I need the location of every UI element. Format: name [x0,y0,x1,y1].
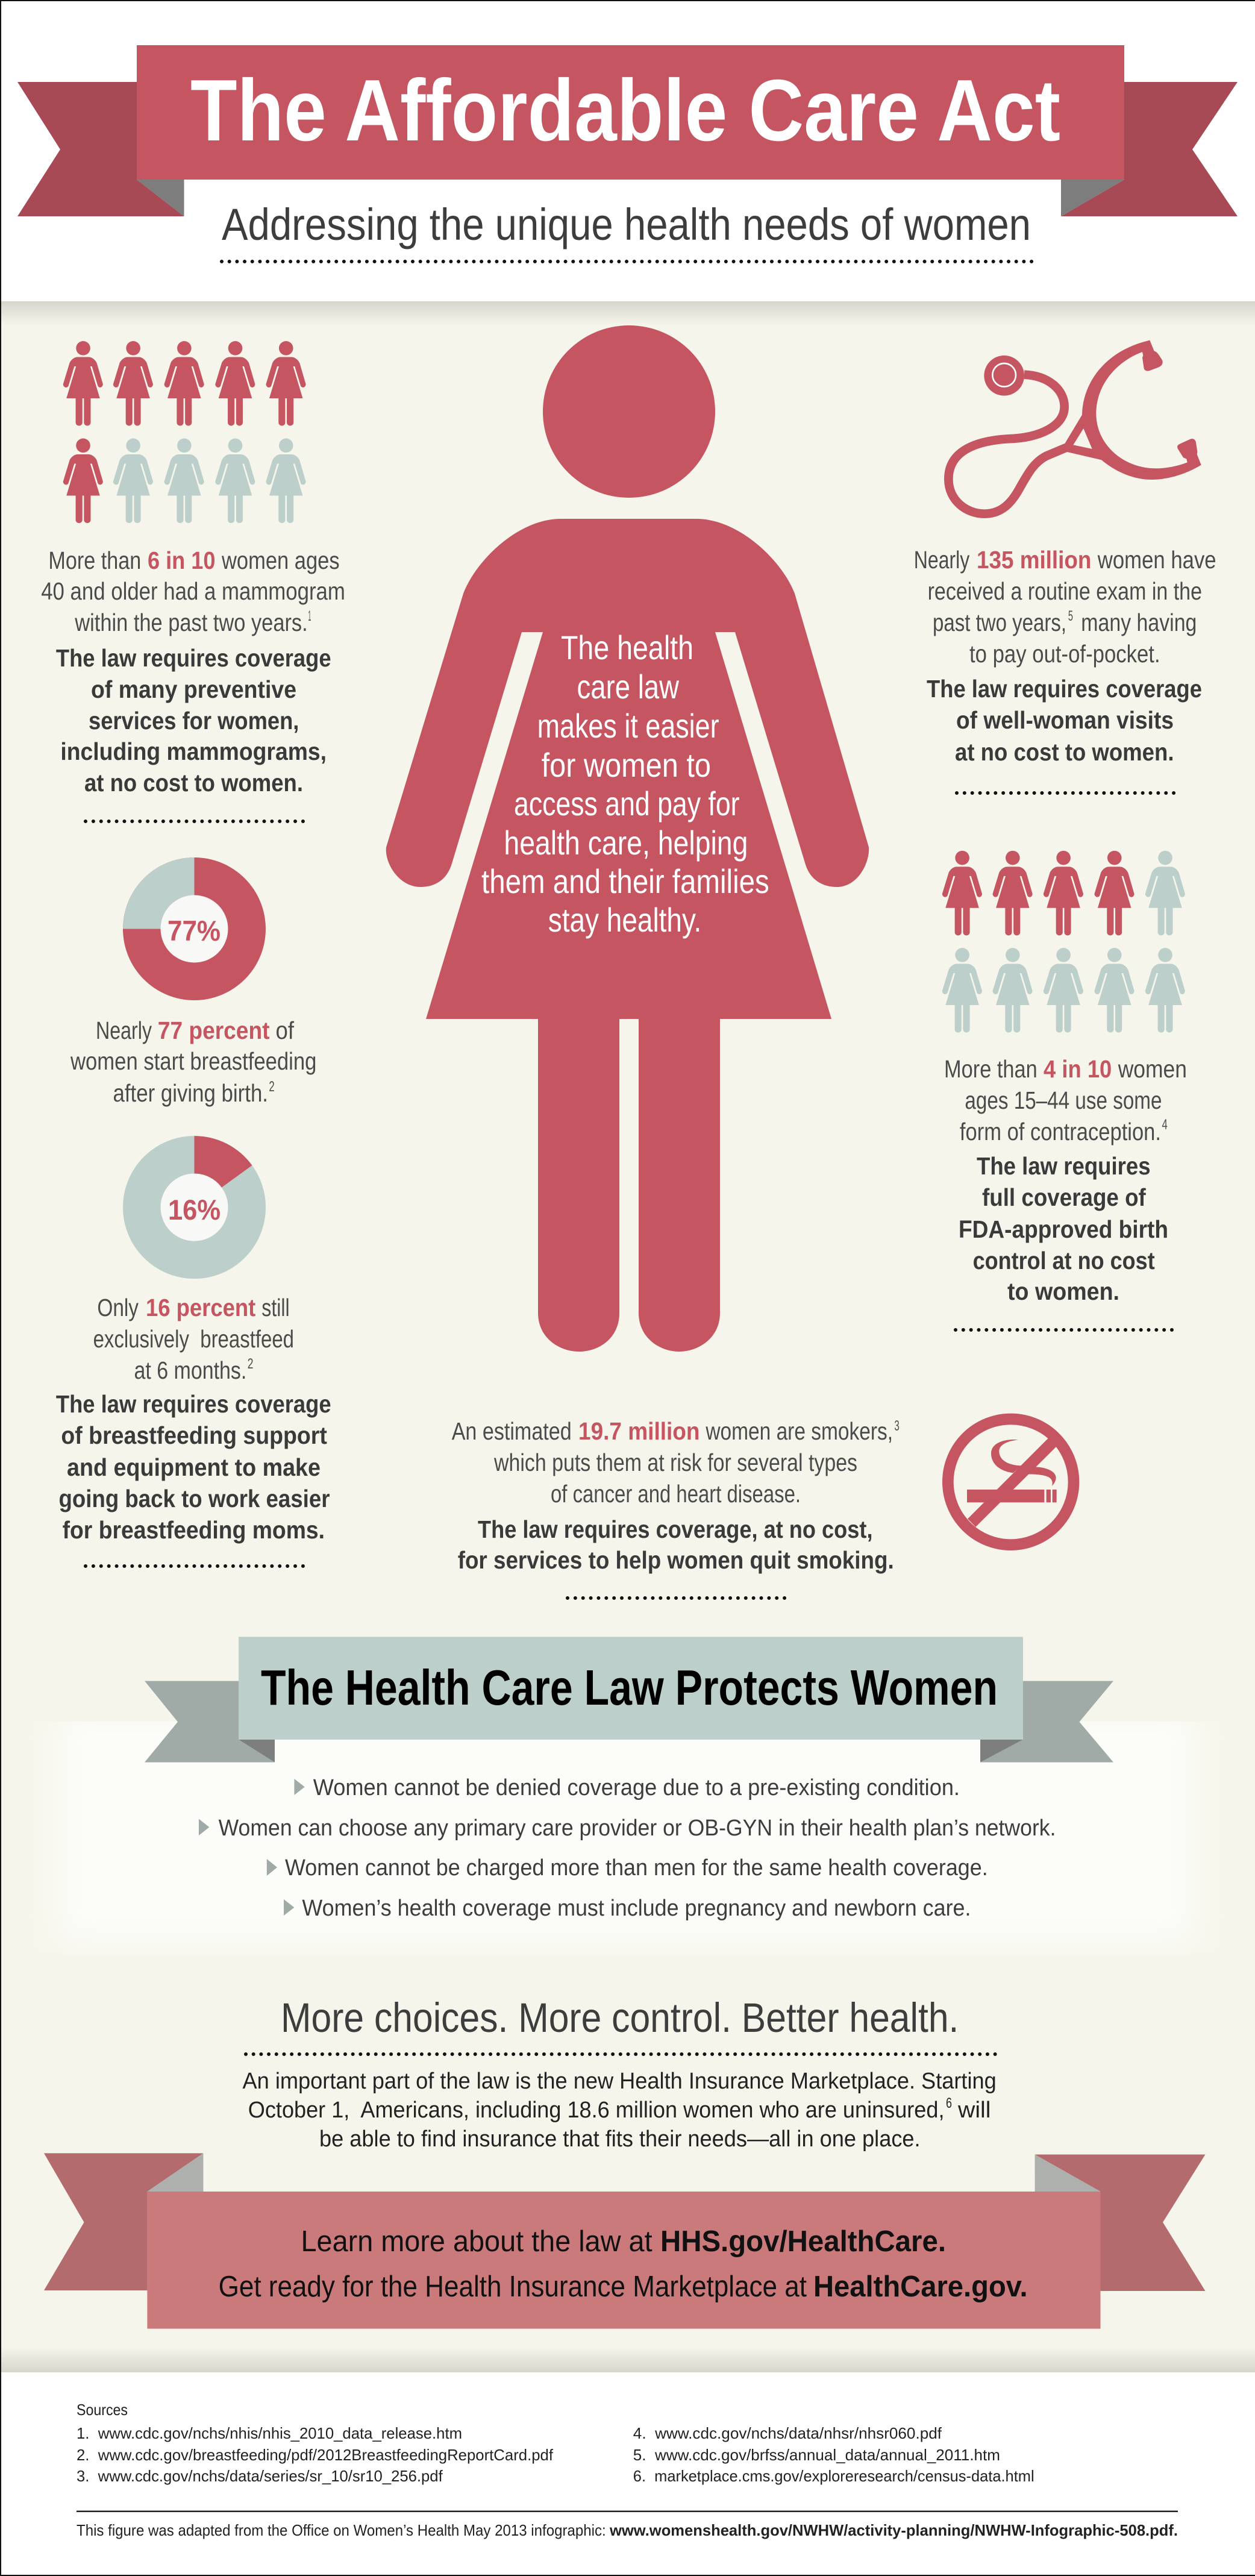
sources: Sources [77,2401,128,2419]
routine exam statistic: many having [1081,609,1197,636]
breastfeeding coverage: of breastfeeding support [61,1421,327,1449]
sources [77,2401,1034,2485]
ribbon: call to action [44,2153,1205,2329]
icon: large woman figure with text: access and pay for [514,785,740,823]
bullet: provider choice: Women can choose any primary care provider or OB-GYN in their health plan’s network. [219,1816,1056,1841]
well-woman coverage: at no cost to women. [955,738,1174,766]
panel: protections glow [54,1705,1199,1946]
sources: 5. www.cdc.gov/brfss/annual_data/annual_2011.htm [633,2446,1000,2464]
breastfeeding coverage: for breastfeeding moms. [63,1516,325,1544]
icon: large woman figure with text: care law [577,668,679,706]
text block: marketplace: will [957,2098,991,2123]
list: protections [199,1775,1056,1921]
icon: large woman figure with text: them and their families [481,862,769,900]
panel: mammogram [41,341,345,821]
16 percent statistic: exclusively breastfeed [93,1325,294,1353]
icon: large woman figure with text: The health [561,628,693,666]
routine exam statistic: 5 [1068,608,1073,624]
panel: breastfeeding [56,857,331,1566]
footer credit: www.womenshealth.gov/NWHW/activity-planning/NWHW-Infographic-508.pdf. [609,2521,1178,2539]
well-woman coverage [927,675,1202,793]
sources: 6. marketplace.cms.gov/exploreresearch/census-data.html [633,2467,1034,2485]
routine exam statistic: received a routine exam in the [928,577,1202,605]
icon: stethoscope [948,340,1201,514]
16 percent statistic: still [261,1294,290,1321]
text block: marketplace [242,2069,997,2152]
smoking statistic: 3 [894,1418,900,1434]
contraception coverage: full coverage of [982,1183,1146,1211]
chart: 16% donut [123,1136,266,1279]
contraception statistic: 4 in 10 [1044,1055,1112,1083]
routine exam statistic: 135 million [977,546,1091,574]
ribbon: call to action: Learn more about the law at [301,2225,653,2258]
ribbon: call to action: HHS.gov/HealthCare. [660,2225,946,2258]
mammogram statistic: women ages [221,547,340,574]
contraception statistic [944,1055,1187,1145]
ribbon: the health care law protects women [145,1637,1113,1763]
ribbon: call to action: Get ready for the Health Insurance Marketplace at [219,2270,807,2303]
routine exam statistic [914,546,1216,668]
mammogram statistic: More than [48,547,141,574]
77 percent statistic: of [276,1017,295,1044]
footer credit: This figure was adapted from the Office on Women’s Health May 2013 infographic: [77,2521,606,2539]
mammogram statistic: 1 [308,608,311,624]
text block: marketplace: October 1, Americans, including 18.6 million women who are uninsured, [248,2098,944,2123]
mammogram coverage: The law requires coverage [56,644,331,672]
icon: large woman figure with text: health care, helping [504,824,748,862]
mammogram statistic: within the past two years. [74,609,308,636]
bullet: pregnancy: Women’s health coverage must include pregnancy and newborn care. [302,1896,971,1921]
routine exam statistic: women have [1097,546,1216,574]
smoking coverage: The law requires coverage, at no cost, [478,1515,872,1543]
sources: 4. www.cdc.gov/nchs/data/nhsr/nhsr060.pdf [633,2424,942,2442]
bullet: charged more: Women cannot be charged more than men for the same health coverage. [285,1855,988,1881]
contraception coverage: control at no cost [973,1247,1155,1274]
77 percent statistic: 2 [269,1079,275,1095]
subtitle: Addressing the unique health needs of women [222,199,1031,249]
icon: ten women, four highlighted [942,851,1185,1033]
mammogram coverage: services for women, [89,707,299,735]
smoking statistic: of cancer and heart disease. [551,1480,801,1508]
text block: marketplace: 6 [946,2095,952,2111]
77 percent statistic: 77 percent [158,1017,270,1044]
contraception coverage [956,1152,1172,1330]
smoking statistic: which puts them at risk for several types [493,1449,857,1476]
text block: marketplace: be able to find insurance that fits their needs—all in one place. [319,2126,921,2152]
chart: 16% donut: 16% [168,1194,221,1226]
breastfeeding coverage: going back to work easier [59,1485,330,1512]
breastfeeding coverage: and equipment to make [67,1453,321,1481]
contraception statistic: More than [944,1055,1037,1083]
mammogram statistic: 40 and older had a mammogram [41,577,345,605]
contraception coverage: to women. [1007,1277,1119,1305]
77 percent statistic [70,1017,316,1107]
routine exam statistic: to pay out-of-pocket. [969,640,1160,668]
mammogram coverage [56,644,331,821]
icon: large woman figure with text: stay healthy. [548,901,701,939]
77 percent statistic: women start breastfeeding [70,1047,316,1075]
16 percent statistic: at 6 months. [134,1356,246,1384]
bullet: pre-existing: Women cannot be denied coverage due to a pre-existing condition. [313,1775,960,1800]
smoking statistic: An estimated [452,1417,572,1445]
mammogram statistic: 6 in 10 [148,547,216,574]
panel: smoking [452,1417,1074,1598]
mammogram statistic [41,547,345,636]
ribbon: the health care law protects women: The Health Care Law Protects Women [261,1659,998,1716]
16 percent statistic [93,1294,294,1384]
16 percent statistic: 2 [248,1356,253,1372]
contraception statistic: women [1118,1055,1187,1083]
heading: more choices: More choices. More control. Better health. [281,1995,959,2041]
sources: 3. www.cdc.gov/nchs/data/series/sr_10/sr10_256.pdf [77,2467,443,2485]
icon: no smoking [948,1419,1074,1545]
mammogram coverage: at no cost to women. [84,769,303,797]
16 percent statistic: 16 percent [146,1294,256,1321]
chart: 77% donut [123,857,266,1000]
icon: large woman figure with text [386,325,869,1352]
title ribbon [17,45,1238,216]
smoking statistic [452,1417,900,1508]
text block: marketplace: An important part of the law is the new Health Insurance Marketplace. Starting [242,2069,997,2094]
smoking coverage [458,1515,894,1598]
panel: contraception [942,851,1187,1330]
routine exam statistic: Nearly [914,546,970,574]
smoking statistic: women are smokers, [706,1417,893,1445]
routine exam statistic: past two years, [933,609,1066,636]
77 percent statistic: after giving birth. [113,1079,268,1107]
title ribbon: The Affordable Care Act [190,61,1060,159]
breastfeeding coverage [56,1390,331,1566]
icon: large woman figure with text: for women to [542,746,711,784]
panel: well-woman visits [914,340,1216,793]
well-woman coverage: The law requires coverage [927,675,1202,703]
icon: ten women, six highlighted [63,341,306,523]
contraception statistic: ages 15–44 use some [965,1086,1162,1114]
well-woman coverage: of well-woman visits [956,706,1174,734]
mammogram coverage: of many preventive [91,675,296,703]
chart: 77% donut: 77% [167,915,221,947]
footer credit [77,2510,1178,2539]
smoking coverage: for services to help women quit smoking. [458,1546,894,1574]
sources: 2. www.cdc.gov/breastfeeding/pdf/2012BreastfeedingReportCard.pdf [77,2446,554,2464]
sources: 1. www.cdc.gov/nchs/nhis/nhis_2010_data_release.htm [77,2424,462,2442]
contraception coverage: The law requires [977,1152,1151,1180]
77 percent statistic: Nearly [96,1017,152,1044]
icon: large woman figure with text: makes it easier [537,707,719,745]
contraception statistic: 4 [1162,1117,1168,1133]
breastfeeding coverage: The law requires coverage [56,1390,331,1418]
smoking statistic: 19.7 million [578,1417,700,1445]
contraception coverage: FDA-approved birth [959,1215,1168,1243]
ribbon: call to action: HealthCare.gov. [813,2270,1028,2303]
contraception statistic: form of contraception. [960,1118,1161,1145]
mammogram coverage: including mammograms, [60,738,327,765]
16 percent statistic: Only [97,1294,139,1321]
